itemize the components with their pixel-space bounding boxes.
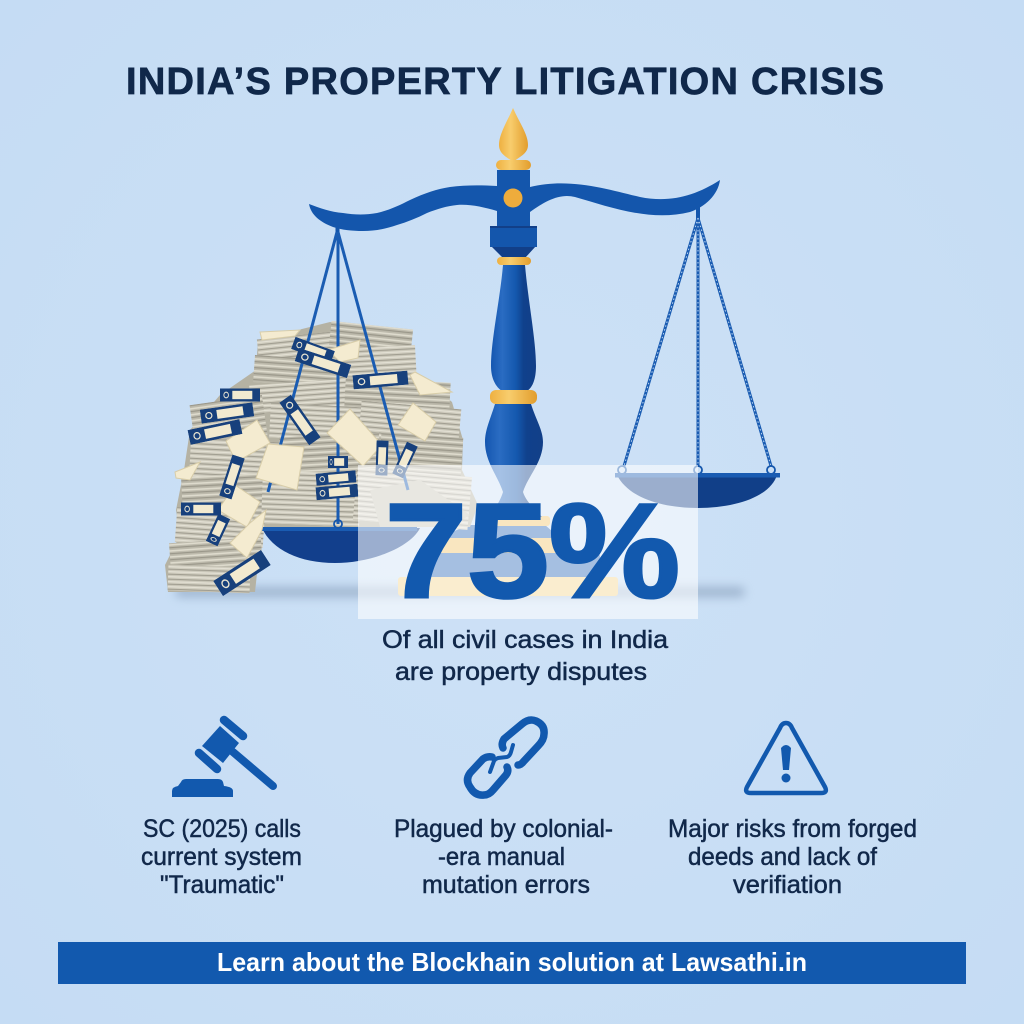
scale beam [309, 180, 720, 238]
paper pile [165, 321, 478, 593]
ground shadow [175, 587, 745, 597]
column 1 text: current system [141, 843, 302, 871]
stat caption: Of all civil cases in India [382, 626, 668, 654]
column 1 text: "Traumatic" [160, 871, 284, 899]
column 2 text: Plagued by colonial- [394, 815, 613, 843]
column 2 text: mutation errors [422, 871, 590, 899]
column 3 text: verifiation [733, 871, 842, 899]
binders [181, 337, 418, 596]
call to action banner [58, 942, 966, 984]
column 1 text [141, 815, 302, 899]
column 3 text: deeds and lack of [688, 843, 877, 871]
illustration: scales of justice [165, 108, 780, 596]
left pan and chains [262, 232, 420, 563]
title: INDIA’S PROPERTY LITIGATION CRISIS [126, 61, 884, 103]
call to action banner: Learn about the Blockhain solution at Lawsathi.in [217, 947, 807, 977]
column 1 text: SC (2025) calls [143, 815, 301, 843]
column 3 text: Major risks from forged [668, 815, 917, 843]
stat caption [382, 626, 668, 686]
big number 75%: 75% [385, 477, 680, 626]
icon: warning triangle [746, 723, 826, 793]
scale base tiers [398, 516, 618, 596]
column 2 text [394, 815, 613, 899]
stat panel: translucent overlay [358, 465, 698, 619]
icon: gavel [172, 720, 273, 797]
column 2 text: -era manual [438, 843, 565, 871]
column 3 text [668, 815, 917, 899]
icon: broken chain link [468, 720, 544, 795]
loose sheets [175, 330, 452, 558]
scale column [485, 108, 543, 517]
right pan and chains [615, 218, 780, 508]
stat caption: are property disputes [395, 658, 647, 686]
